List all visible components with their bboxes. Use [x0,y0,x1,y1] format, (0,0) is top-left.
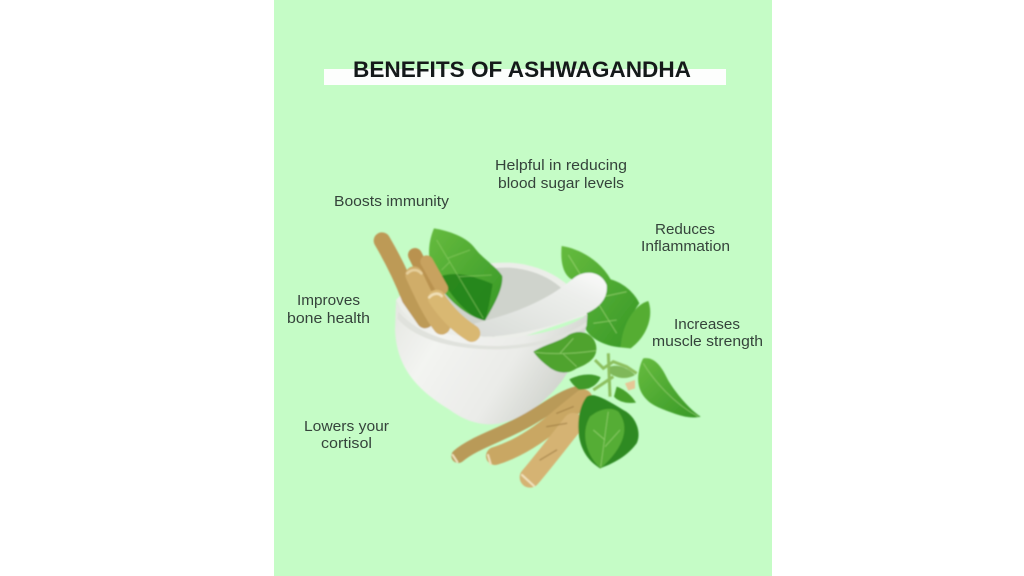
benefit: inflammation [641,221,730,255]
mortar interior [396,263,587,347]
title: BENEFITS OF ASHWAGANDHA [353,57,691,82]
benefit: inflammation: Inflammation [641,238,730,255]
title highlight bar [324,69,726,85]
benefit: bone health: bone health [287,310,370,327]
benefit: muscle strength [652,316,763,350]
benefit: inflammation: Reduces [655,221,715,238]
benefit: muscle strength: Increases [674,316,740,333]
benefit: immunity: Boosts immunity [334,193,450,210]
benefit: blood sugar: Helpful in reducing [495,157,627,174]
icon: centre leaves [533,332,637,403]
icon: front leaf upper right [621,301,650,348]
icon: right leaf [638,358,701,418]
benefit: cortisol [304,418,389,452]
icon: mortar bowl [395,300,587,424]
benefit: cortisol: cortisol [321,435,372,452]
mortar lip shadow [397,312,587,349]
benefit: blood sugar: blood sugar levels [498,175,624,192]
icon: bottom leaves [578,395,639,468]
benefit: blood sugar [495,157,627,192]
icon: roots below mortar [453,393,583,486]
icon: roots in mortar [382,241,472,333]
benefit: muscle strength: muscle strength [652,333,763,350]
benefit: cortisol: Lowers your [304,418,389,435]
icon: pestle [473,273,607,337]
icon: leaf in mortar [429,228,502,321]
icon: far leaves right [561,246,639,347]
title with highlight bar [324,57,726,85]
background panel [274,0,772,576]
benefit: bone health: Improves [297,292,360,309]
benefit: bone health [287,292,370,327]
illustration: mortar, pestle, roots and leaves [382,228,701,486]
